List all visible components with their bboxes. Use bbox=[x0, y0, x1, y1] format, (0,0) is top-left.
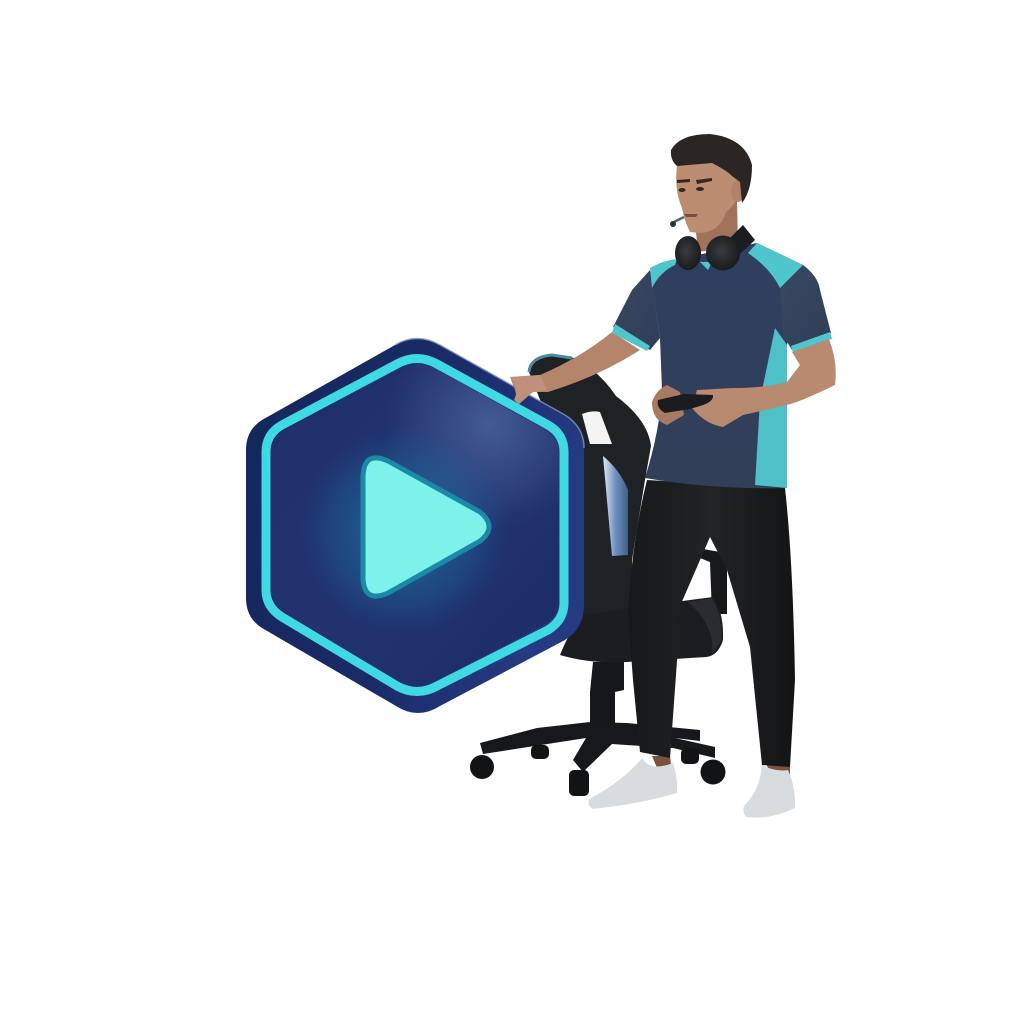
ear bbox=[731, 180, 745, 202]
chair arm bbox=[700, 549, 727, 614]
right arm and hand bbox=[692, 339, 836, 427]
ankles bbox=[652, 756, 790, 775]
hexagon edge highlight bbox=[395, 338, 584, 448]
pants bbox=[628, 480, 795, 767]
t-shirt body bbox=[645, 243, 803, 488]
chair seat bbox=[560, 597, 723, 662]
illustration: gamer standing beside chair holding a hexagon play icon bbox=[246, 134, 836, 818]
headphones bbox=[675, 236, 740, 270]
chair column bbox=[590, 662, 624, 728]
right sleeve bbox=[780, 265, 831, 350]
arm reaching to hexagon bbox=[510, 332, 640, 403]
face bbox=[676, 160, 742, 233]
left shoe bbox=[588, 758, 677, 809]
chair casters bbox=[470, 745, 726, 796]
shirt teal shoulder left bbox=[650, 259, 677, 288]
game controller bbox=[658, 394, 713, 413]
sleeve trims bbox=[612, 324, 832, 353]
collar bbox=[728, 225, 755, 254]
chair backrest bbox=[529, 355, 651, 618]
hexagon inner panel bbox=[271, 364, 559, 681]
backrest headrest cut-out bbox=[582, 411, 612, 444]
neck bbox=[695, 200, 738, 252]
hexagon outer frame bbox=[246, 338, 584, 713]
shirt teal side panel bbox=[755, 328, 787, 488]
left hand bbox=[652, 385, 684, 425]
hand gripping hexagon bbox=[510, 375, 547, 404]
hair bbox=[671, 134, 752, 203]
play triangle bbox=[363, 458, 489, 596]
right shoe bbox=[743, 765, 795, 818]
face features bbox=[677, 178, 712, 217]
gamer bbox=[510, 134, 836, 818]
left sleeve bbox=[613, 270, 660, 350]
chair base legs bbox=[480, 722, 715, 772]
hexagon neon ring bbox=[266, 358, 564, 692]
backrest blue strip bbox=[603, 456, 628, 556]
office chair bbox=[470, 355, 727, 796]
shirt teal shoulder right bbox=[748, 243, 803, 288]
hexagon play button bbox=[246, 338, 584, 713]
headset microphone bbox=[670, 217, 684, 227]
